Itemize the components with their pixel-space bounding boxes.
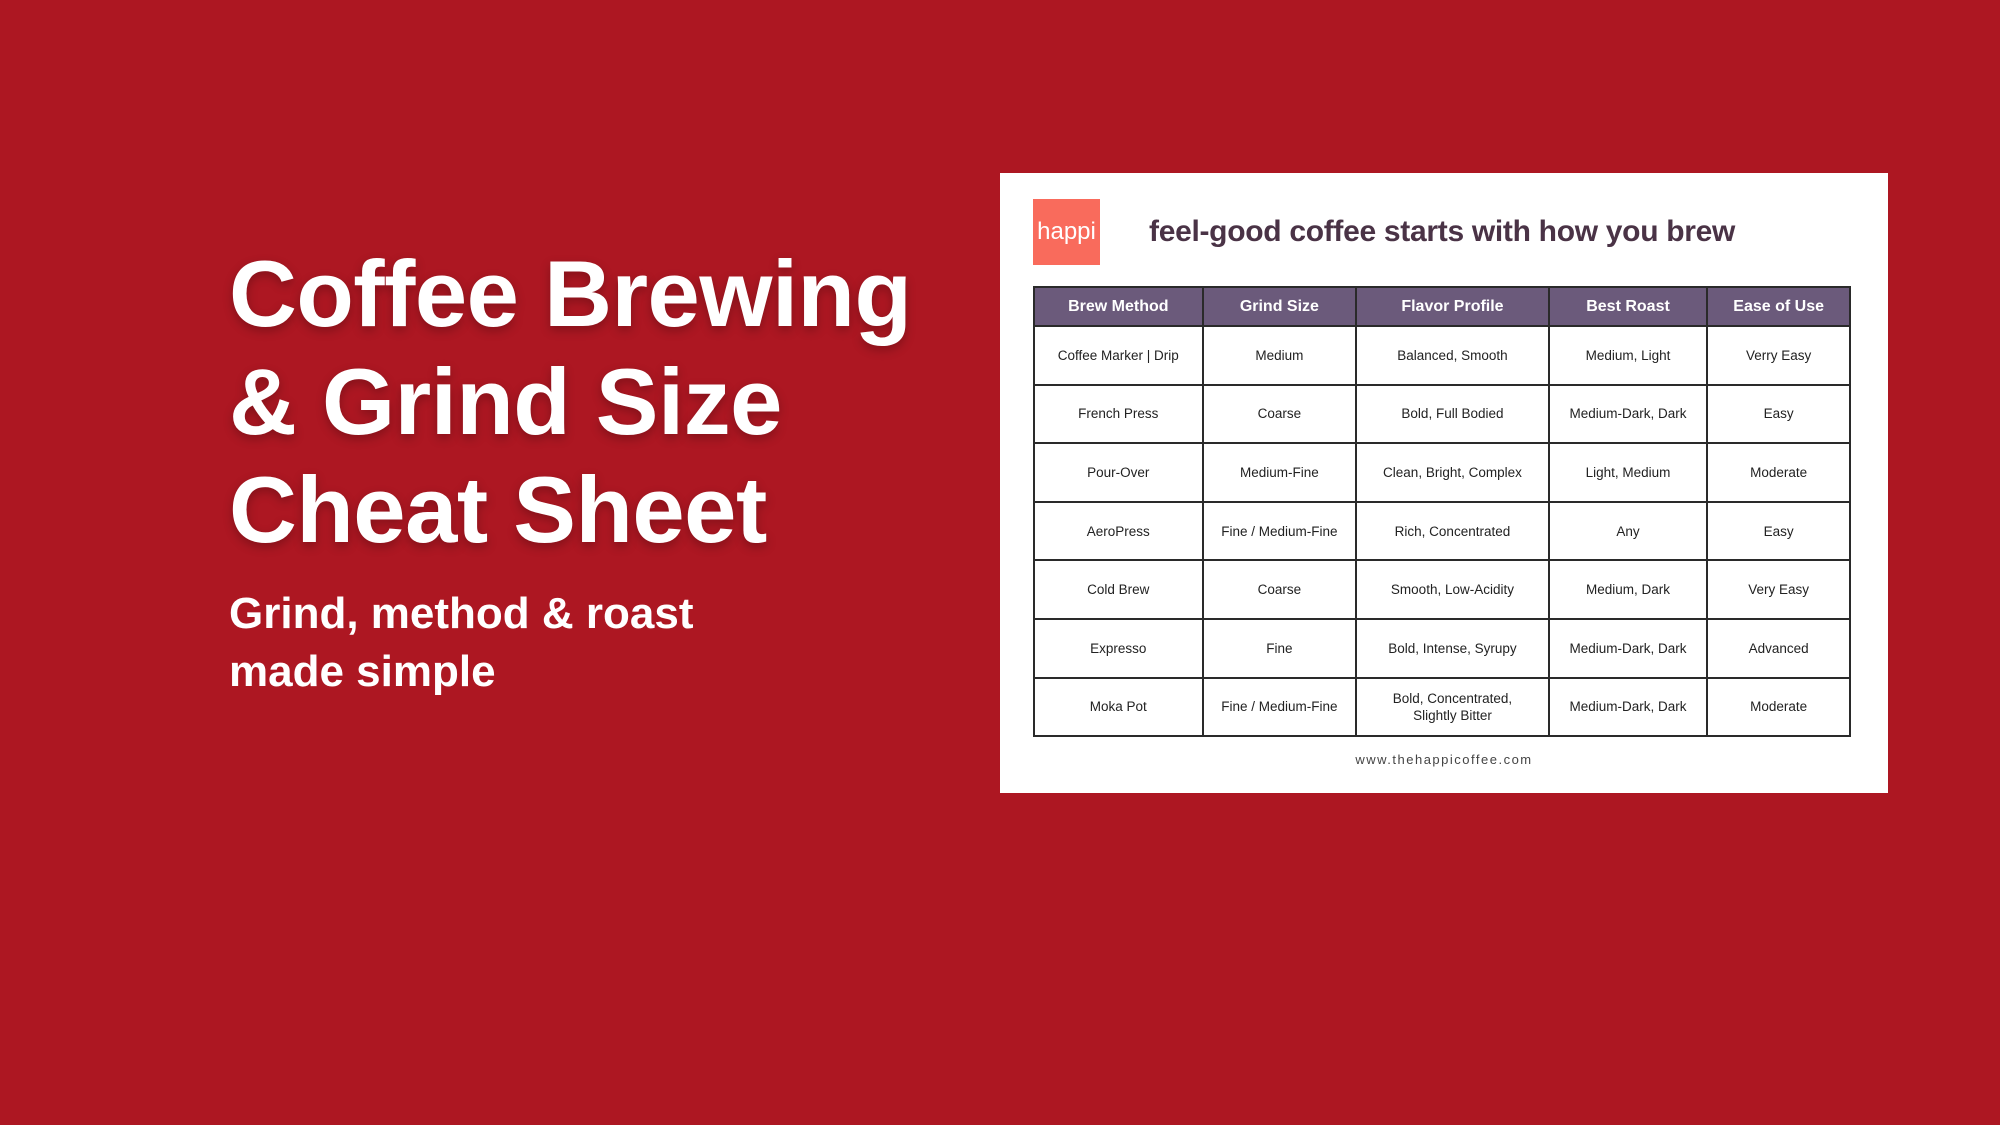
table: brewing methods: Grind Size: [1240, 298, 1319, 315]
table: brewing methods: Medium-Fine: [1240, 465, 1319, 480]
subtitle: Grind, method & roast: [229, 589, 693, 638]
table: brewing methods: Easy: [1764, 524, 1794, 539]
title: [228, 241, 911, 562]
table: brewing methods: AeroPress: [1087, 524, 1150, 539]
table: brewing methods: Any: [1616, 524, 1640, 539]
table: brewing methods: Medium-Dark, Dark: [1570, 699, 1687, 714]
table: brewing methods: Bold, Intense, Syrupy: [1388, 641, 1517, 656]
table: brewing methods: Expresso: [1090, 641, 1146, 656]
table: brewing methods: Very Easy: [1748, 582, 1809, 597]
table: brewing methods: Flavor Profile: [1401, 298, 1504, 315]
table: brewing methods: Best Roast: [1586, 298, 1670, 315]
table: brewing methods: Coarse: [1258, 582, 1301, 597]
table: brewing methods: Slightly Bitter: [1413, 708, 1492, 723]
subtitle: made simple: [229, 647, 496, 696]
table: brewing methods: Easy: [1764, 406, 1794, 421]
table: brewing methods: Moderate: [1750, 699, 1807, 714]
subtitle: [229, 589, 693, 696]
table: brewing methods: [1033, 286, 1851, 737]
table: brewing methods: Brew Method: [1068, 298, 1169, 315]
panel: cheat sheet card: [1000, 173, 1888, 793]
table: brewing methods: Balanced, Smooth: [1397, 348, 1508, 363]
table: brewing methods: Fine: [1266, 641, 1292, 656]
icon: happi logo: [1033, 199, 1100, 265]
table: brewing methods: Moka Pot: [1090, 699, 1147, 714]
table: brewing methods: Bold, Concentrated,: [1393, 691, 1512, 706]
table: brewing methods: Fine / Medium-Fine: [1221, 524, 1338, 539]
table: brewing methods: Bold, Full Bodied: [1401, 406, 1503, 421]
table: brewing methods: Light, Medium: [1586, 465, 1670, 480]
table: brewing methods: Fine / Medium-Fine: [1221, 699, 1338, 714]
table: brewing methods: Smooth, Low-Acidity: [1391, 582, 1514, 597]
table: brewing methods: Coarse: [1258, 406, 1301, 421]
table: brewing methods: Verry Easy: [1746, 348, 1811, 363]
table: brewing methods: Moderate: [1750, 465, 1807, 480]
table: brewing methods: Cold Brew: [1087, 582, 1149, 597]
table: brewing methods: Medium, Light: [1586, 348, 1670, 363]
title: Coffee Brewing: [229, 241, 911, 346]
table: brewing methods: Medium: [1255, 348, 1303, 363]
table: brewing methods: Coffee Marker | Drip: [1058, 348, 1179, 363]
table: brewing methods: Advanced: [1749, 641, 1809, 656]
icon: happi logo: happi: [1037, 218, 1096, 245]
title: Cheat Sheet: [229, 457, 767, 562]
table: brewing methods: Medium-Dark, Dark: [1570, 641, 1687, 656]
table: brewing methods: Medium, Dark: [1586, 582, 1670, 597]
table: brewing methods: Pour-Over: [1087, 465, 1149, 480]
table: brewing methods: Medium-Dark, Dark: [1570, 406, 1687, 421]
table: brewing methods: French Press: [1078, 406, 1158, 421]
card heading: feel-good coffee starts with how you brew: [1149, 215, 1735, 248]
table: brewing methods: Ease of Use: [1733, 298, 1824, 315]
title: & Grind Size: [229, 349, 782, 454]
footer url: www.thehappicoffee.com: [1355, 752, 1533, 767]
table: brewing methods: Clean, Bright, Complex: [1383, 465, 1522, 480]
table: brewing methods: Rich, Concentrated: [1395, 524, 1510, 539]
